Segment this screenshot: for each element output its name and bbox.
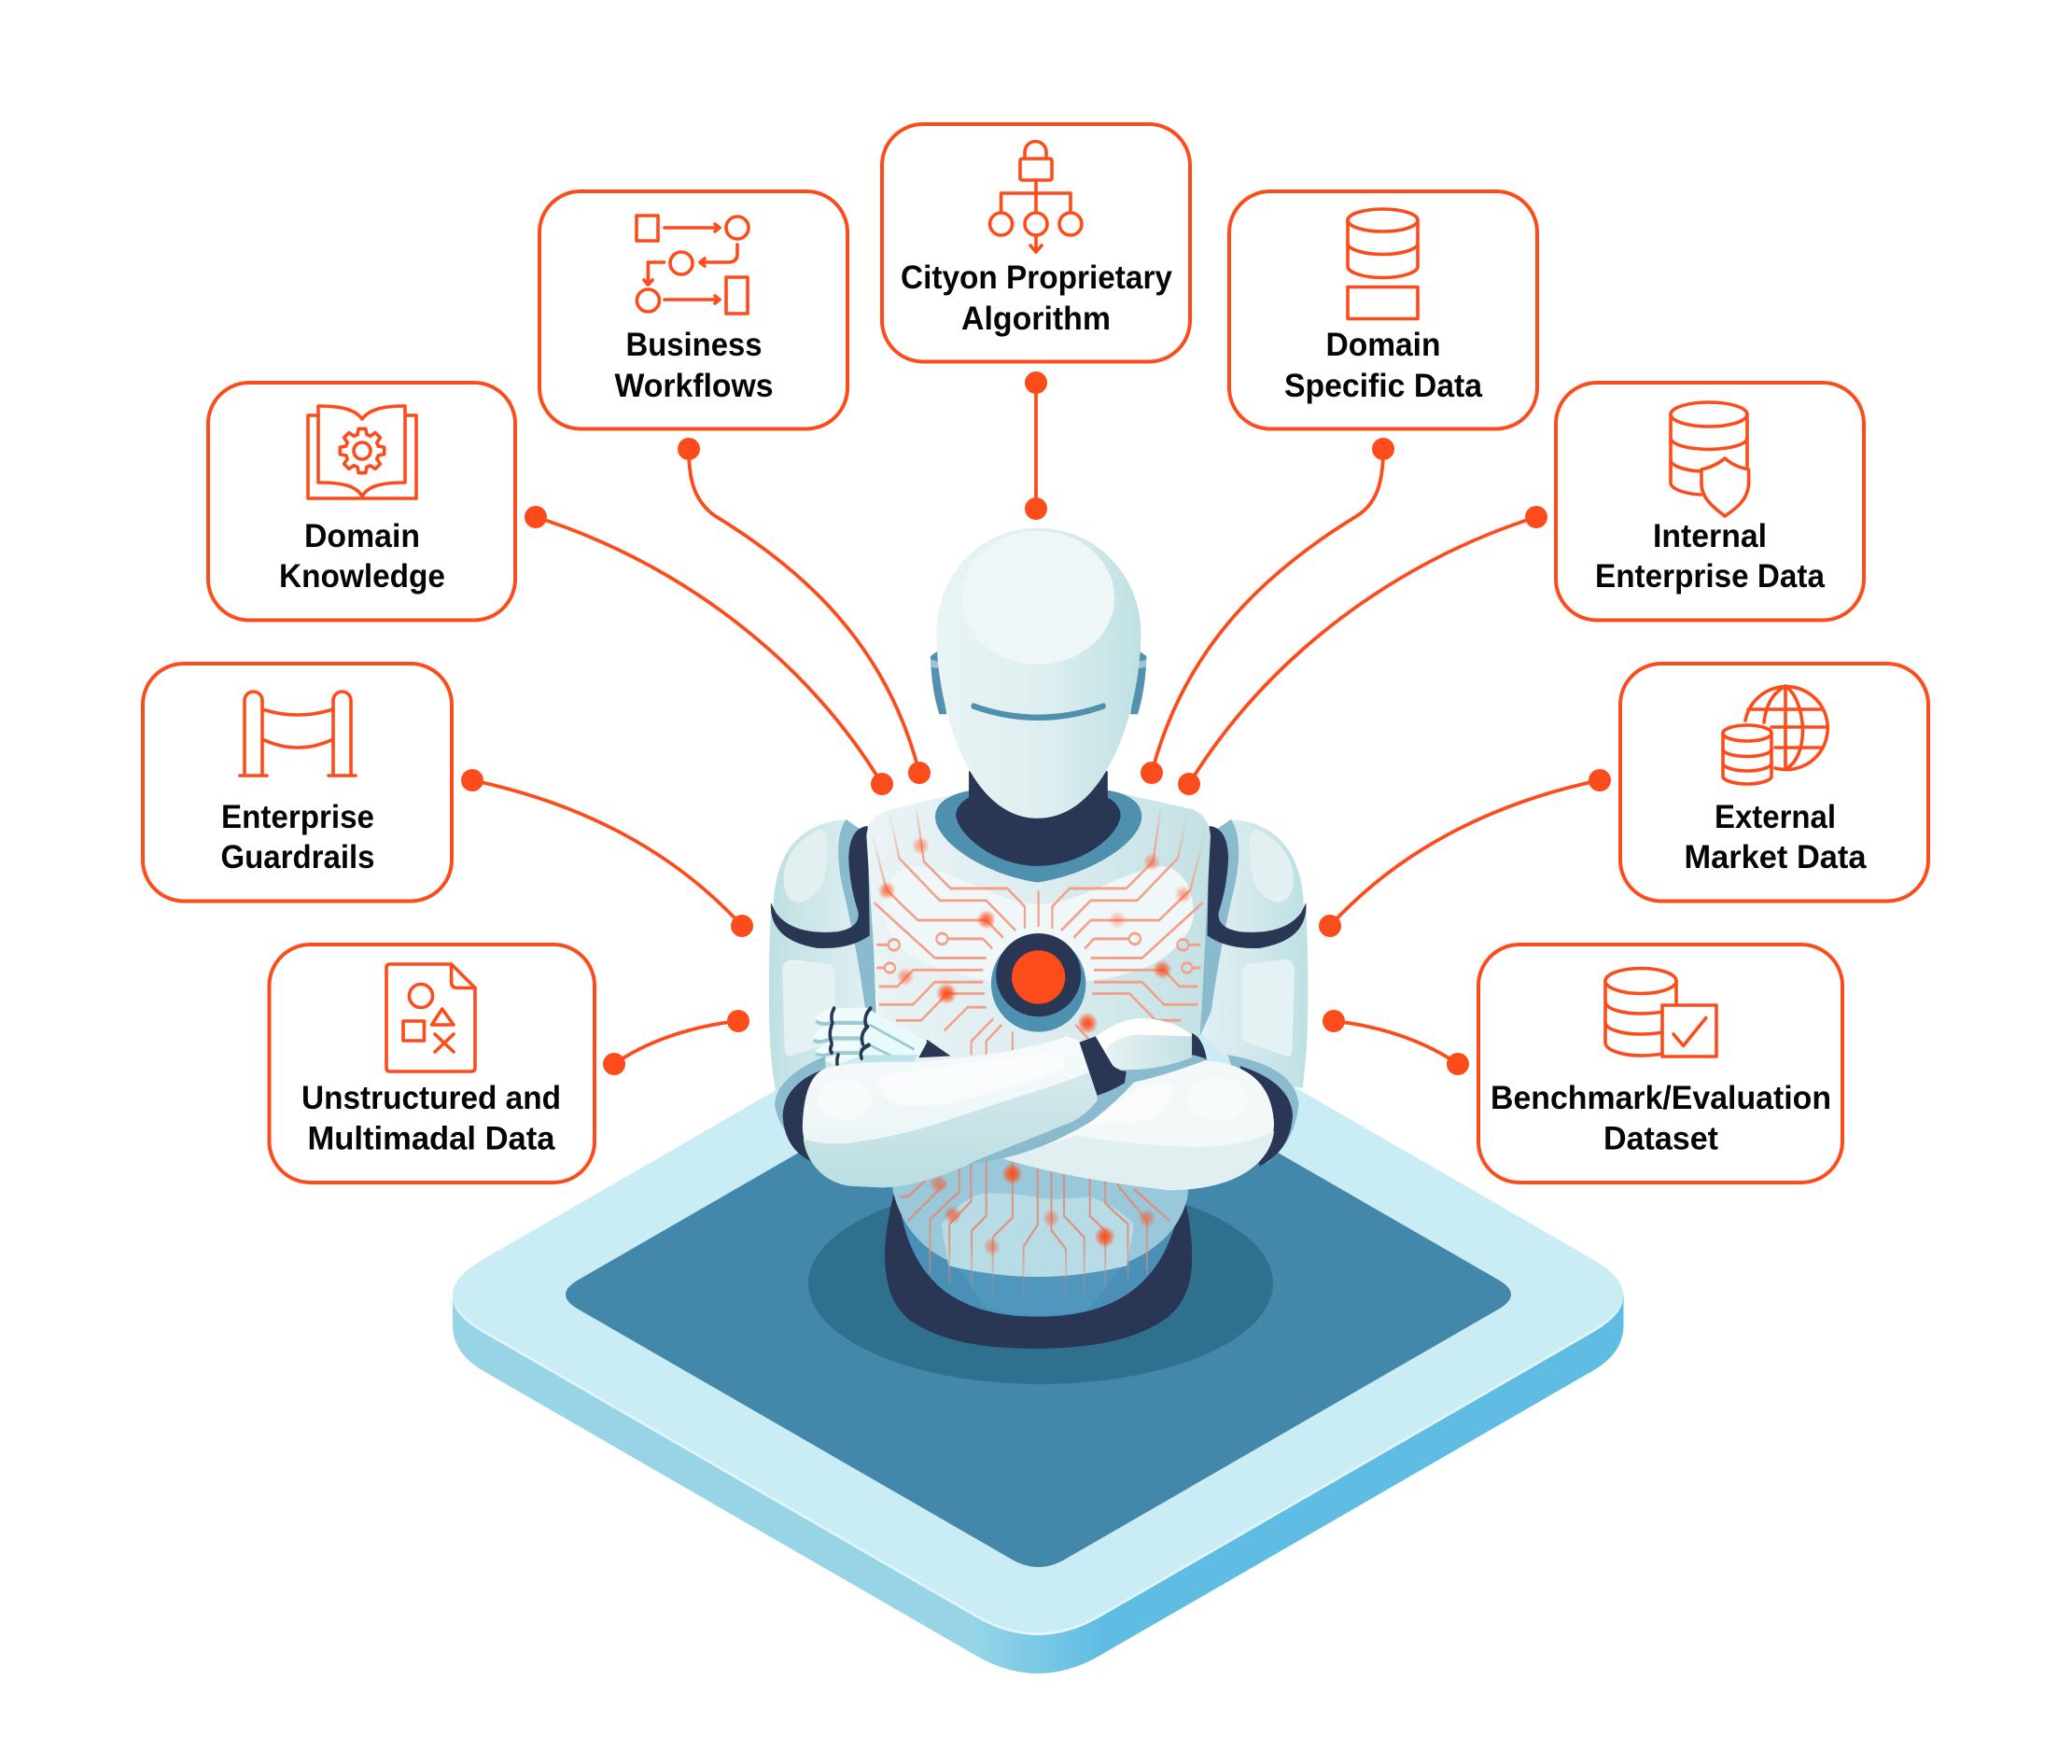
connector: Cityon Proprietary Algorithm <box>1025 371 1047 520</box>
robot front forearm <box>803 1036 1098 1187</box>
label: External Market Data: Market Data <box>1684 839 1867 875</box>
panel: External Market Data <box>1620 664 1928 902</box>
label: Enterprise Guardrails <box>220 799 375 875</box>
robot rear forearm <box>1002 1060 1274 1190</box>
robot figure <box>769 528 1308 1349</box>
label: Internal Enterprise Data <box>1595 518 1825 595</box>
robot elbow cuffs <box>775 1033 1299 1166</box>
robot belly circuit traces <box>900 1156 1169 1301</box>
label: External Market Data <box>1684 799 1867 875</box>
panel: Unstructured and Multimadal Data <box>269 945 595 1183</box>
icon: globe with database <box>1723 686 1827 784</box>
label: Unstructured and Multimadal Data <box>301 1080 561 1157</box>
label: Unstructured and Multimadal Data: Unstructured and <box>301 1080 561 1116</box>
label: Benchmark/Evaluation Dataset: Benchmark/Evaluation <box>1491 1080 1831 1116</box>
connector: Enterprise Guardrails <box>461 769 753 937</box>
label: Domain Knowledge: Domain <box>304 518 420 554</box>
panel: Domain Specific Data <box>1229 191 1537 429</box>
label: Cityon Proprietary Algorithm: Algorithm <box>961 301 1111 337</box>
icon: rope barrier <box>240 692 356 776</box>
icon: database with box <box>1348 209 1418 319</box>
icon: document with shapes <box>386 964 475 1071</box>
label: Benchmark/Evaluation Dataset <box>1491 1080 1831 1157</box>
panel: Internal Enterprise Data <box>1556 383 1864 620</box>
robot wrist and right hand <box>1079 1018 1192 1096</box>
robot left upper arm <box>769 819 877 1090</box>
label: Benchmark/Evaluation Dataset: Dataset <box>1603 1120 1718 1157</box>
panel: Business Workflows <box>539 191 847 429</box>
icon: workflow diagram <box>637 216 749 314</box>
label: Business Workflows: Workflows <box>614 368 773 404</box>
icon: database with shield <box>1671 402 1749 516</box>
panel: Benchmark/Evaluation Dataset <box>1478 945 1842 1183</box>
label: Internal Enterprise Data: Internal <box>1653 518 1767 554</box>
label: Business Workflows <box>614 327 773 404</box>
robot left hand fingers <box>813 1008 951 1065</box>
panel: Cityon Proprietary Algorithm <box>882 124 1190 362</box>
panel: Enterprise Guardrails <box>143 664 452 902</box>
robot chest core <box>991 933 1085 1032</box>
isometric platform <box>453 957 1624 1673</box>
robot circuit glow points <box>877 836 1192 1256</box>
label: Business Workflows: Business <box>625 327 762 363</box>
label: Domain Specific Data: Specific Data <box>1284 368 1483 404</box>
robot right upper arm <box>1200 819 1308 1087</box>
icon: book with gear <box>308 406 416 498</box>
icon: database with checkmark <box>1605 969 1716 1057</box>
label: Domain Knowledge <box>279 518 445 595</box>
label: External Market Data: External <box>1715 799 1836 835</box>
robot head <box>931 528 1146 819</box>
label: Internal Enterprise Data: Enterprise Data <box>1595 558 1825 595</box>
connector: Internal Enterprise Data <box>1178 506 1547 795</box>
panel: Domain Knowledge <box>208 383 515 620</box>
label: Unstructured and Multimadal Data: Multimadal Data <box>308 1120 555 1157</box>
icon: locked hierarchy <box>990 142 1082 252</box>
connector: External Market Data <box>1319 769 1611 937</box>
robot forearm blue edge <box>967 1055 1208 1165</box>
robot lower body shell <box>885 1192 1192 1349</box>
connector: Domain Knowledge <box>525 506 893 795</box>
label: Enterprise Guardrails: Enterprise <box>221 799 374 835</box>
robot collar and neck <box>935 771 1141 882</box>
connector: Domain Specific Data <box>1141 438 1394 784</box>
label: Enterprise Guardrails: Guardrails <box>220 839 375 875</box>
label: Domain Specific Data: Domain <box>1325 327 1441 363</box>
robot torso <box>866 791 1211 1277</box>
connector: Benchmark/Evaluation Dataset <box>1323 1010 1469 1075</box>
connector: Business Workflows <box>678 438 931 784</box>
connector: Unstructured and Multimadal Data <box>603 1010 749 1075</box>
label: Cityon Proprietary Algorithm <box>901 259 1172 337</box>
label: Domain Knowledge: Knowledge <box>279 558 445 595</box>
robot chest circuit traces <box>873 808 1204 1055</box>
label: Cityon Proprietary Algorithm: Cityon Proprietary <box>901 259 1172 296</box>
label: Domain Specific Data <box>1284 327 1483 404</box>
